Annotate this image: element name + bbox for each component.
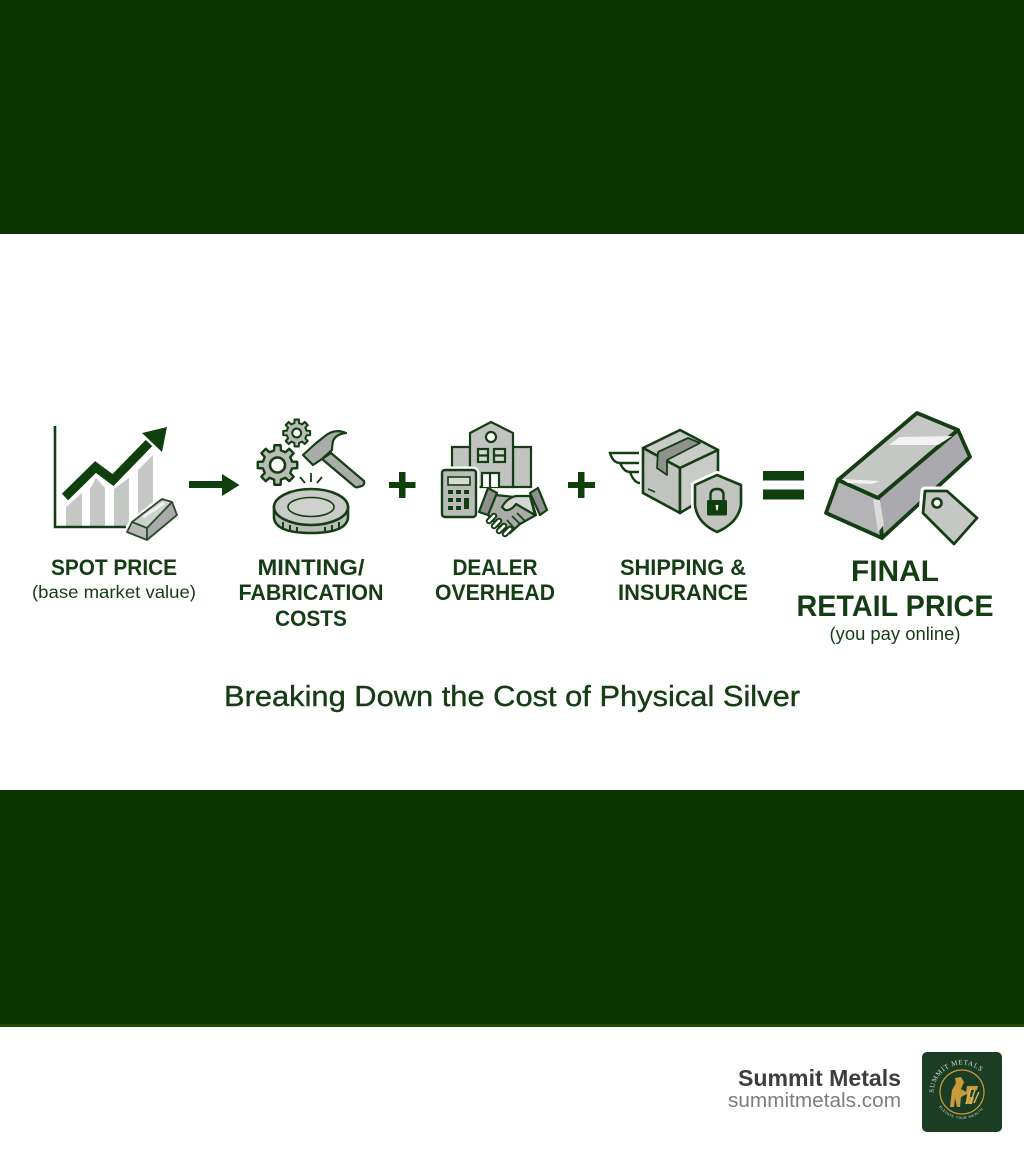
label: spot price [32,555,196,602]
icon: large gear [258,445,297,485]
icon: hammer [303,431,364,487]
bottom green band [0,790,1024,1027]
icon: winged box with shield [610,430,741,532]
label: dealer overhead: DEALER [452,555,538,580]
icon: shipping box [643,430,718,513]
label: spot price: SPOT PRICE [51,555,177,580]
title: Breaking Down the Cost of Physical Silver [224,681,800,713]
label: final retail price [796,555,994,644]
label: minting / fabrication costs: COSTS [275,606,347,631]
label: shipping and insurance: SHIPPING & [620,555,746,580]
brand name and website: summitmetals.com [728,1090,901,1112]
label: shipping and insurance: INSURANCE [618,580,748,605]
icon: building [452,422,531,487]
icon: gears, hammer and coin [258,420,364,533]
icon: coin [274,489,348,533]
label: minting / fabrication costs: FABRICATION [238,580,384,605]
label: dealer overhead: OVERHEAD [435,580,555,605]
arrow: spot price to minting [189,474,240,496]
equals sign [763,471,804,500]
label: spot price: (base market value) [32,582,196,602]
icon: small gear [283,420,310,446]
label: final retail price: FINAL [851,555,939,588]
top green band [0,0,1024,234]
icon: handshake [479,488,547,534]
logo: Summit Metals badge: ELEVATE YOUR WEALTH [939,1106,983,1120]
icon: calculator [442,470,476,517]
plus sign 1 [389,472,416,498]
icon: spot price chart with silver bar [55,426,177,540]
logo: Summit Metals badge: SUMMIT METALS [929,1060,983,1092]
icon: price tag [923,491,977,544]
label: final retail price: RETAIL PRICE [796,590,994,623]
label: final retail price: (you pay online) [830,624,960,644]
icon: shield with lock [695,475,741,532]
label: shipping and insurance [618,555,748,605]
icon: wings [610,453,640,483]
brand name and website: Summit Metals [738,1065,901,1091]
plus sign 2 [568,472,595,498]
label: minting / fabrication costs [238,555,384,631]
label: minting / fabrication costs: MINTING/ [258,555,364,580]
icon: dealer building, calculator, handshake [442,422,547,534]
label: dealer overhead [435,555,555,605]
brand name and website [728,1065,901,1112]
icon: large silver bar with price tag [826,413,977,544]
logo: Summit Metals badge [922,1052,1002,1132]
icon: silver bar [826,413,970,538]
